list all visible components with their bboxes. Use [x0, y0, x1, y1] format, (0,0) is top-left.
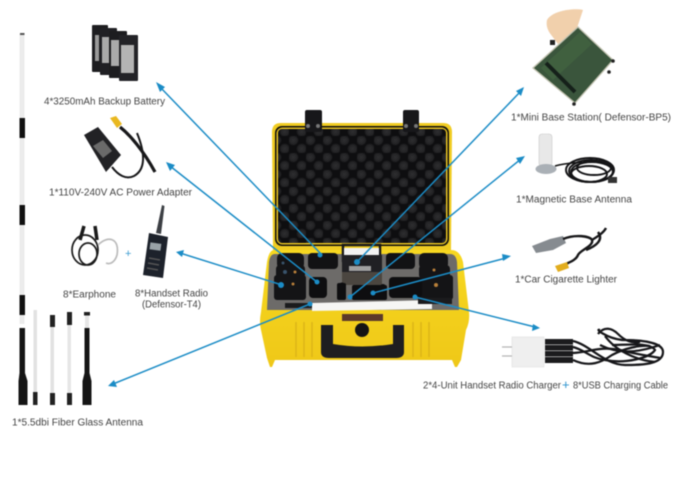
arrow: power adapter [166, 162, 320, 284]
label: handset radio: (Defensor-T4) [142, 300, 201, 310]
label: charger and USB cable: 2*4-Unit Handset Radio Charger [423, 380, 562, 392]
plus sign: earphone and radio: + [125, 248, 131, 260]
arrow: car lighter [370, 254, 511, 296]
lid latches [305, 110, 419, 132]
icon: magnetic base antenna [536, 134, 617, 183]
white antenna strip [312, 300, 432, 311]
icon: backup batteries [92, 25, 138, 81]
icon: mini base station [533, 9, 615, 106]
arrow: fiber glass antenna [108, 302, 312, 387]
long fiber glass antenna [18, 33, 28, 405]
nameplate [342, 314, 383, 321]
icon: earphone [72, 226, 117, 265]
carry handle [321, 325, 404, 358]
label: power adapter: 1*110V-240V AC Power Adapter [49, 188, 193, 198]
case interior foam tray [267, 254, 459, 310]
label: fiber glass antenna: 1*5.5dbi Fiber Glass Antenna [12, 418, 143, 428]
label: earphone: 8*Earphone [63, 290, 116, 300]
arrows [108, 82, 540, 387]
yellow equipment case [260, 110, 469, 367]
central base station in case [342, 245, 382, 285]
arrow: magnetic antenna [348, 156, 525, 300]
label: charger and USB cable: + [562, 377, 570, 392]
label: handset radio: 8*Handset Radio [135, 288, 208, 300]
icon: charger with USB cables [502, 329, 663, 367]
right handset radios [419, 253, 453, 300]
lock button [355, 323, 369, 337]
case base [260, 250, 469, 367]
arrow: charger [412, 294, 540, 331]
icon: car cigarette lighter [532, 228, 606, 272]
label: mini base station: 1*Mini Base Station( Defensor-BP5) [511, 112, 671, 124]
left handset radios [274, 253, 306, 300]
case lid with foam [272, 123, 452, 250]
top battery blocks [308, 253, 415, 269]
label: handset radio [135, 288, 208, 310]
arrow: mini base station [354, 87, 524, 265]
label: car cigarette lighter: 1*Car Cigarette Lighter [515, 274, 618, 286]
label: magnetic base antenna: 1*Magnetic Base Antenna [516, 194, 632, 206]
label: charger and USB cable [423, 377, 668, 392]
icon: AC power adapter [84, 116, 155, 177]
arrow: battery [156, 82, 322, 258]
adapter and accessories in tray [309, 277, 422, 300]
label: charger and USB cable: 8*USB Charging Cable [573, 380, 668, 392]
label: backup battery: 4*3250mAh Backup Battery [44, 96, 165, 108]
short antennas [33, 310, 92, 405]
arrow: handset radio [176, 250, 284, 288]
icon: handset radio [143, 205, 168, 278]
black bars beside strip [285, 298, 452, 308]
